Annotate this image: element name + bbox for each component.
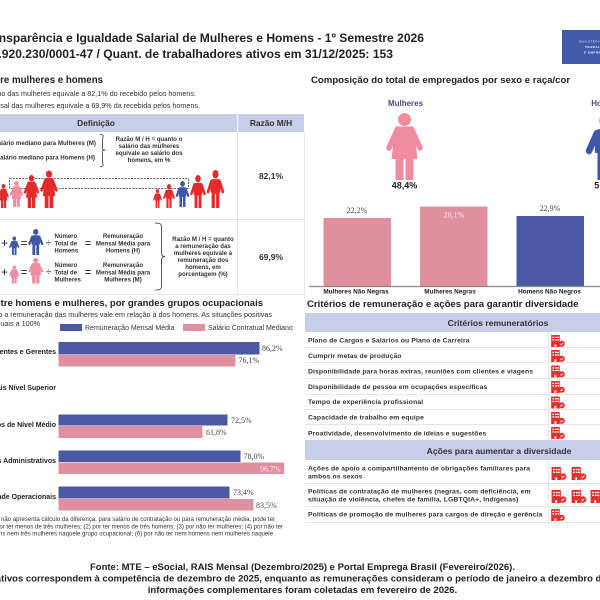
equation: women: Remuneração (103, 262, 143, 269)
group: operational (0, 486, 277, 510)
group: managers: 76,1% (238, 356, 260, 365)
text block: occupational note (0, 310, 272, 328)
table header: Definição (77, 118, 115, 128)
row: median salary definition: equivale ao salário dos (115, 150, 183, 157)
bar chart: sex and race: 26,1% (444, 210, 465, 220)
equation: women: Número (54, 263, 78, 269)
equation: men: Mensal Média para (96, 240, 151, 248)
legend: Salário Contratual Mediano (208, 325, 293, 332)
row: availability (308, 366, 565, 378)
equation: women (1, 258, 151, 284)
figure: women (388, 99, 424, 190)
bar chart: sex and race: 22,9% (540, 204, 561, 213)
table header (305, 313, 600, 332)
group: administrative: 96,7% (260, 464, 281, 474)
row: promotion policies: Políticas de promoção de mulheres para cargos de direção e gerência (308, 512, 542, 518)
equation: men: Remuneração (103, 233, 143, 240)
row: career plan: Plano de Cargos e Salários ou Plano de Carreira (308, 338, 470, 344)
group: operational: 73,4% (233, 488, 254, 497)
equation: women: Mulheres (54, 278, 82, 284)
row: mean pay definition: mulheres equivale à (174, 250, 233, 257)
group: managers (0, 342, 283, 366)
equation: women: = (84, 265, 92, 279)
row: family duties (308, 466, 586, 480)
equation: women: ÷ (46, 267, 52, 278)
heading: criteria: Critérios de remuneração e ações para garantir diversidade (307, 299, 578, 310)
row: median salary definition: Razão M / H = quanto o (116, 136, 183, 143)
equation: men: ÷ (46, 238, 52, 249)
equation: women: Mensal Média para (96, 270, 151, 276)
row: family duties: ambos os sexos (308, 474, 363, 480)
row: hiring policies (308, 488, 600, 504)
equation: men: Homens (54, 248, 79, 254)
row: mean pay definition (1, 223, 234, 290)
bar chart: sex and race: 22,2% (347, 206, 368, 215)
table: diversity actions (305, 440, 600, 522)
row: hiring policies: Políticas de contratação de mulheres (negras, com deficiência, em (308, 488, 531, 496)
row: median salary definition: salário das mulheres (119, 143, 180, 150)
row: hiring policies: situação de violência, chefes de família, LGBTQIA+, Indígenas) (308, 496, 518, 504)
legend: Remuneração Mensal Média (85, 325, 175, 332)
row: mean pay definition: remuneração dos (178, 257, 229, 264)
table header: Critérios remuneratórios (448, 318, 549, 328)
table: definition (0, 114, 304, 295)
table header (0, 114, 304, 132)
text block: footnote (0, 517, 283, 538)
equation: men: Homens (H) (106, 248, 140, 254)
row: occupations: Disponibilidade de pessoa em ocupações específicas (308, 384, 487, 391)
row: proactivity (308, 427, 565, 439)
table: remuneration criteria (305, 313, 600, 440)
figure: men (589, 99, 600, 190)
table header (305, 440, 600, 460)
bar chart: sex and race: Mulheres Não Negras (323, 288, 389, 296)
row: mean pay definition: a remuneração das (175, 243, 231, 250)
equation: men: Total de (54, 242, 78, 248)
equation: men (1, 229, 151, 255)
figure: women: 48,4% (392, 180, 417, 190)
row: proactivity: Proatividade, desenvolvimento de ideias e sugestões (308, 430, 486, 438)
group: mid level: 72,5% (231, 416, 252, 425)
row: occupations (308, 381, 565, 393)
row: promotion policies (308, 509, 565, 521)
figure: women: Mulheres (388, 99, 424, 108)
bar chart: sex and race: Homens Não Negros (518, 288, 581, 296)
bar chart: occupational groups (0, 342, 284, 510)
text block: source (0, 562, 600, 596)
equation: women: = (20, 265, 28, 279)
row: production: Cumprir metas de produção (308, 353, 402, 360)
row: production (308, 350, 565, 362)
equation: women: + (1, 265, 8, 279)
row: mean pay definition: homens, em (185, 264, 221, 271)
row: career plan (308, 335, 565, 347)
table header: Ações para aumentar a diversidade (427, 446, 572, 456)
row: mean pay definition: Razão M / H = quanto (172, 236, 234, 243)
row: family duties: Ações de apoio a compartilhamento de obrigações familiares para (308, 466, 530, 472)
equation: men: = (84, 236, 92, 250)
row: teamwork: Capacidade de trabalho em equipe (308, 414, 424, 422)
value: mean ratio: 69,9% (259, 252, 283, 262)
bar chart: sex and race (309, 204, 600, 296)
title (0, 31, 424, 61)
group: administrative: 78,0% (244, 452, 264, 461)
text block: source: Fonte: MTE – eSocial, RAIS Mensal (Dezembro/2025) e Portal Emprega Brasil (Fevereiro/2026). (90, 562, 515, 573)
table header: Razão M/H (250, 118, 292, 128)
icons: family figures (0, 170, 223, 208)
group: administrative (0, 450, 284, 474)
row: median salary definition (0, 134, 183, 166)
row: availability: Disponibilidade para horas extras, reuniões com clientes e viagens (308, 368, 533, 376)
text block: pay summary (0, 89, 200, 110)
group: managers: 86,2% (262, 344, 283, 353)
group: mid level (0, 414, 252, 438)
row: teamwork (308, 412, 565, 424)
value: median ratio: 82,1% (259, 171, 283, 181)
equation: men: = (20, 236, 28, 250)
legend (60, 324, 293, 332)
equation: men: Número (54, 234, 78, 240)
logo: ministry (562, 30, 600, 64)
heading: composition: Composição do total de empregados por sexo e raça/cor (311, 75, 570, 86)
row: median salary definition: homens, em % (128, 157, 171, 164)
row: mean pay definition: porcentagem (%) (178, 271, 228, 278)
group: mid level: 61,8% (206, 428, 227, 437)
group: operational: 83,5% (256, 501, 277, 510)
row: experience (308, 396, 565, 408)
equation: women: Mulheres (M) (104, 276, 142, 284)
equation: women: Total de (54, 270, 78, 276)
text block: source: informações complementares foram coletadas em fevereiro de 2026. (148, 585, 457, 596)
equation: men: + (1, 236, 8, 250)
bar chart: sex and race: Mulheres Negras (424, 288, 476, 296)
row: experience: Tempo de experiência profissional (308, 399, 423, 406)
